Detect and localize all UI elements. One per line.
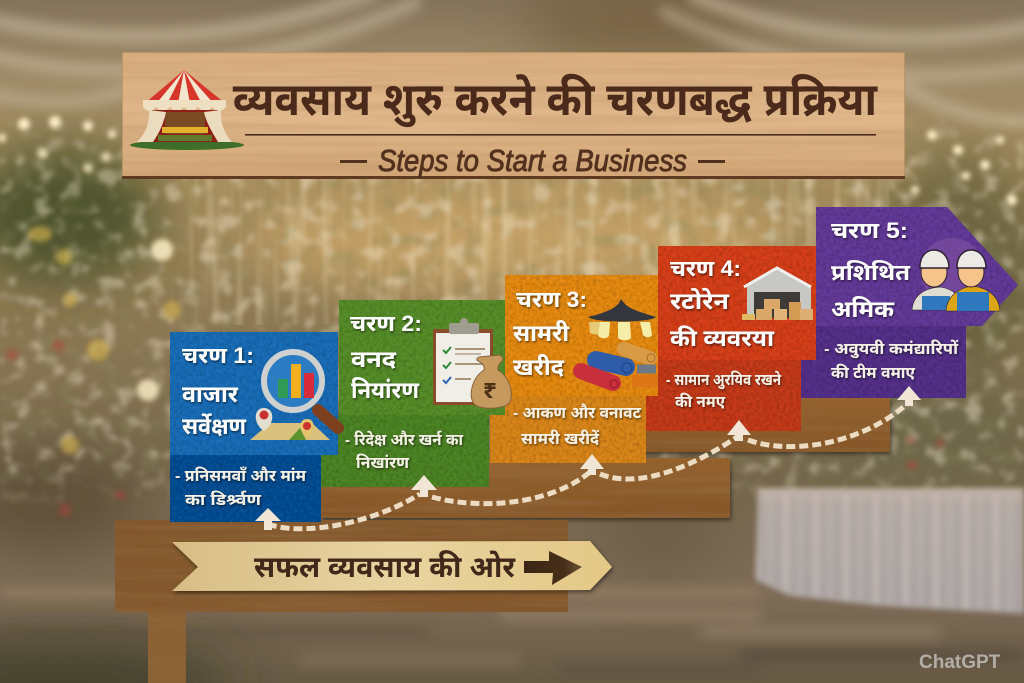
step 2 panel (321, 300, 511, 487)
icon: lamp and fabric rolls (581, 299, 658, 388)
title board (122, 52, 905, 179)
direction arrow plank (172, 541, 612, 591)
dashed progress path with arrowheads (255, 386, 921, 530)
icon: magnifier, bar chart and map pins (250, 352, 338, 440)
floor light streaks (0, 588, 1024, 675)
step 4 panel (646, 246, 816, 431)
step 1 panel: सर्वेक्षण (182, 413, 246, 439)
icon: warehouse with boxes (742, 268, 813, 320)
icon: two workers with helmets (912, 238, 1000, 311)
wooden step backing planks (321, 398, 890, 518)
step 1 panel: वाजार (182, 381, 239, 407)
step 2 panel: - रिदेक्ष और खर्न का (345, 430, 463, 449)
icon: clipboard and money bag (433, 318, 511, 408)
step 5 panel (801, 207, 1018, 398)
step 5 panel: प्रशिथित (831, 260, 910, 285)
step 2 panel: वनद (351, 346, 397, 372)
watermark: ChatGPT (919, 652, 1001, 673)
step 3 panel: चरण 3: (516, 287, 587, 312)
icon: striped circus tent (130, 70, 244, 150)
step 3 panel: खरीद (513, 354, 565, 380)
step 2 panel: निखांरण (356, 454, 410, 472)
signpost post (148, 610, 186, 683)
step 5 panel: अमिक (831, 296, 895, 322)
step 3 panel (490, 275, 658, 463)
step 3 panel: - आकण और वनावट (513, 404, 641, 422)
step 5 panel: चरण 5: (831, 218, 908, 243)
step 4 panel: चरण 4: (670, 256, 741, 281)
step 4 panel: रटोरेन (670, 288, 730, 314)
step 5 panel: की टीम वमाए (831, 363, 915, 382)
step 5 panel: - अवुयवी कमंद्यारिपों (824, 339, 959, 359)
subtitle: Steps to Start a Business (378, 143, 687, 178)
step 1 panel: चरण 1: (182, 343, 254, 368)
step 1 panel (170, 332, 338, 522)
draped table in background (755, 488, 1024, 614)
sign caption: सफल व्यवसाय की ओर (254, 550, 516, 584)
step 2 panel: नियांरण (351, 377, 419, 403)
sign arrow glyph (524, 551, 582, 585)
step 3 panel: सामरी (513, 320, 570, 346)
step 4 panel: - सामान अुरयिव रखने (666, 370, 782, 390)
signboard with direction arrow (115, 520, 612, 612)
step 4 panel: की नमए (675, 392, 725, 411)
step 1 panel: का डिर्श्र्वण (185, 490, 262, 509)
step 4 panel: की व्यवरया (670, 325, 775, 351)
step 1 panel: - प्रनिसमवाँ और मांम (175, 466, 307, 485)
icon: clipboard and money bag: ₹ (483, 377, 497, 404)
step 2 panel: चरण 2: (350, 311, 422, 336)
step 3 panel: सामरी खरीदें (521, 429, 600, 448)
heading: व्यवसाय शुरु करने की चरणबद्ध प्रक्रिया (232, 72, 878, 127)
